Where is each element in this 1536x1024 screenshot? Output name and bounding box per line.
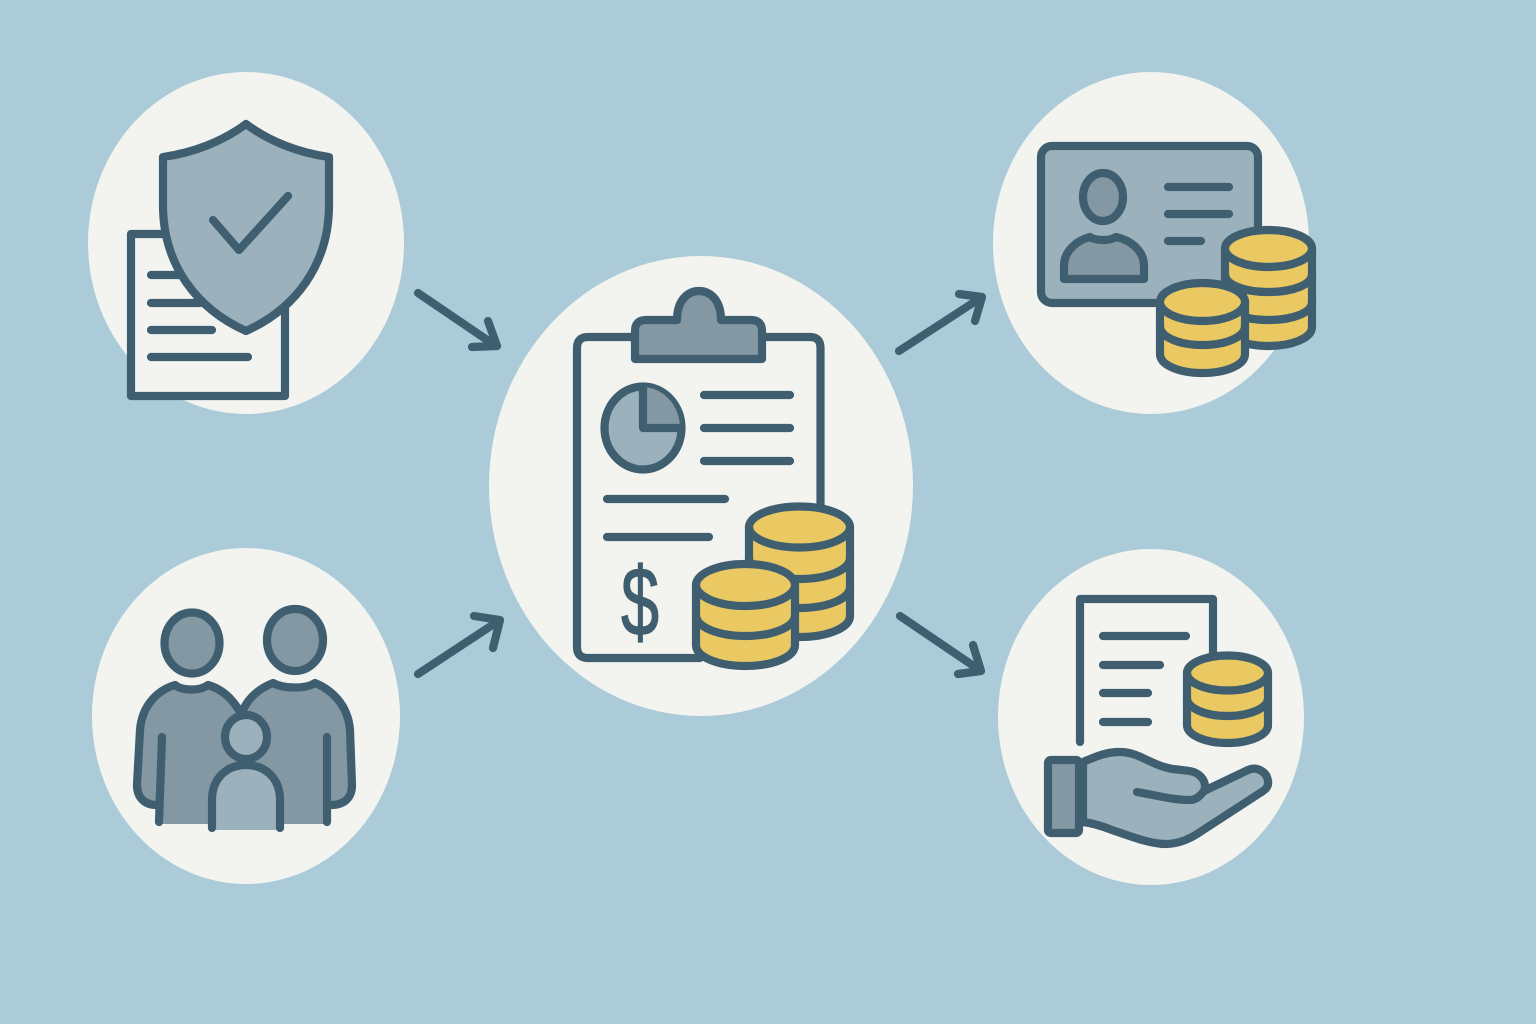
arrow: center to ID card: [899, 294, 982, 351]
node: insurance shield and document: [88, 72, 404, 414]
icon: left parent: [137, 612, 240, 824]
icon: back coin stack: [1225, 230, 1312, 346]
icon: open hand: [1048, 752, 1268, 844]
icon: front coin stack: [696, 564, 795, 666]
icon: coin stack: [1187, 656, 1268, 743]
icon: child: [212, 715, 280, 830]
icon: pie chart: [604, 386, 682, 470]
arrow: center to hand: [900, 616, 981, 674]
icon: clipboard board: [577, 291, 820, 658]
icon: right parent: [242, 609, 352, 824]
icon: shield with check: [163, 124, 329, 331]
icon: document: [131, 234, 285, 396]
icon: front coin stack: [1160, 283, 1245, 373]
icon: document: [1080, 599, 1213, 742]
node: clipboard report with coins: [489, 256, 913, 716]
arrow: family to center: [418, 616, 500, 674]
dollar sign: $: [621, 547, 659, 656]
report text lines: [607, 395, 790, 537]
node: hand receiving document and coins: [998, 549, 1304, 885]
node: family: [92, 548, 400, 884]
icon: ID card: [1041, 146, 1258, 303]
arrow: shield to center: [418, 293, 497, 347]
icon: back coin stack: [749, 506, 850, 637]
arm lines: [159, 737, 327, 822]
node: ID card with coins: [993, 72, 1312, 414]
